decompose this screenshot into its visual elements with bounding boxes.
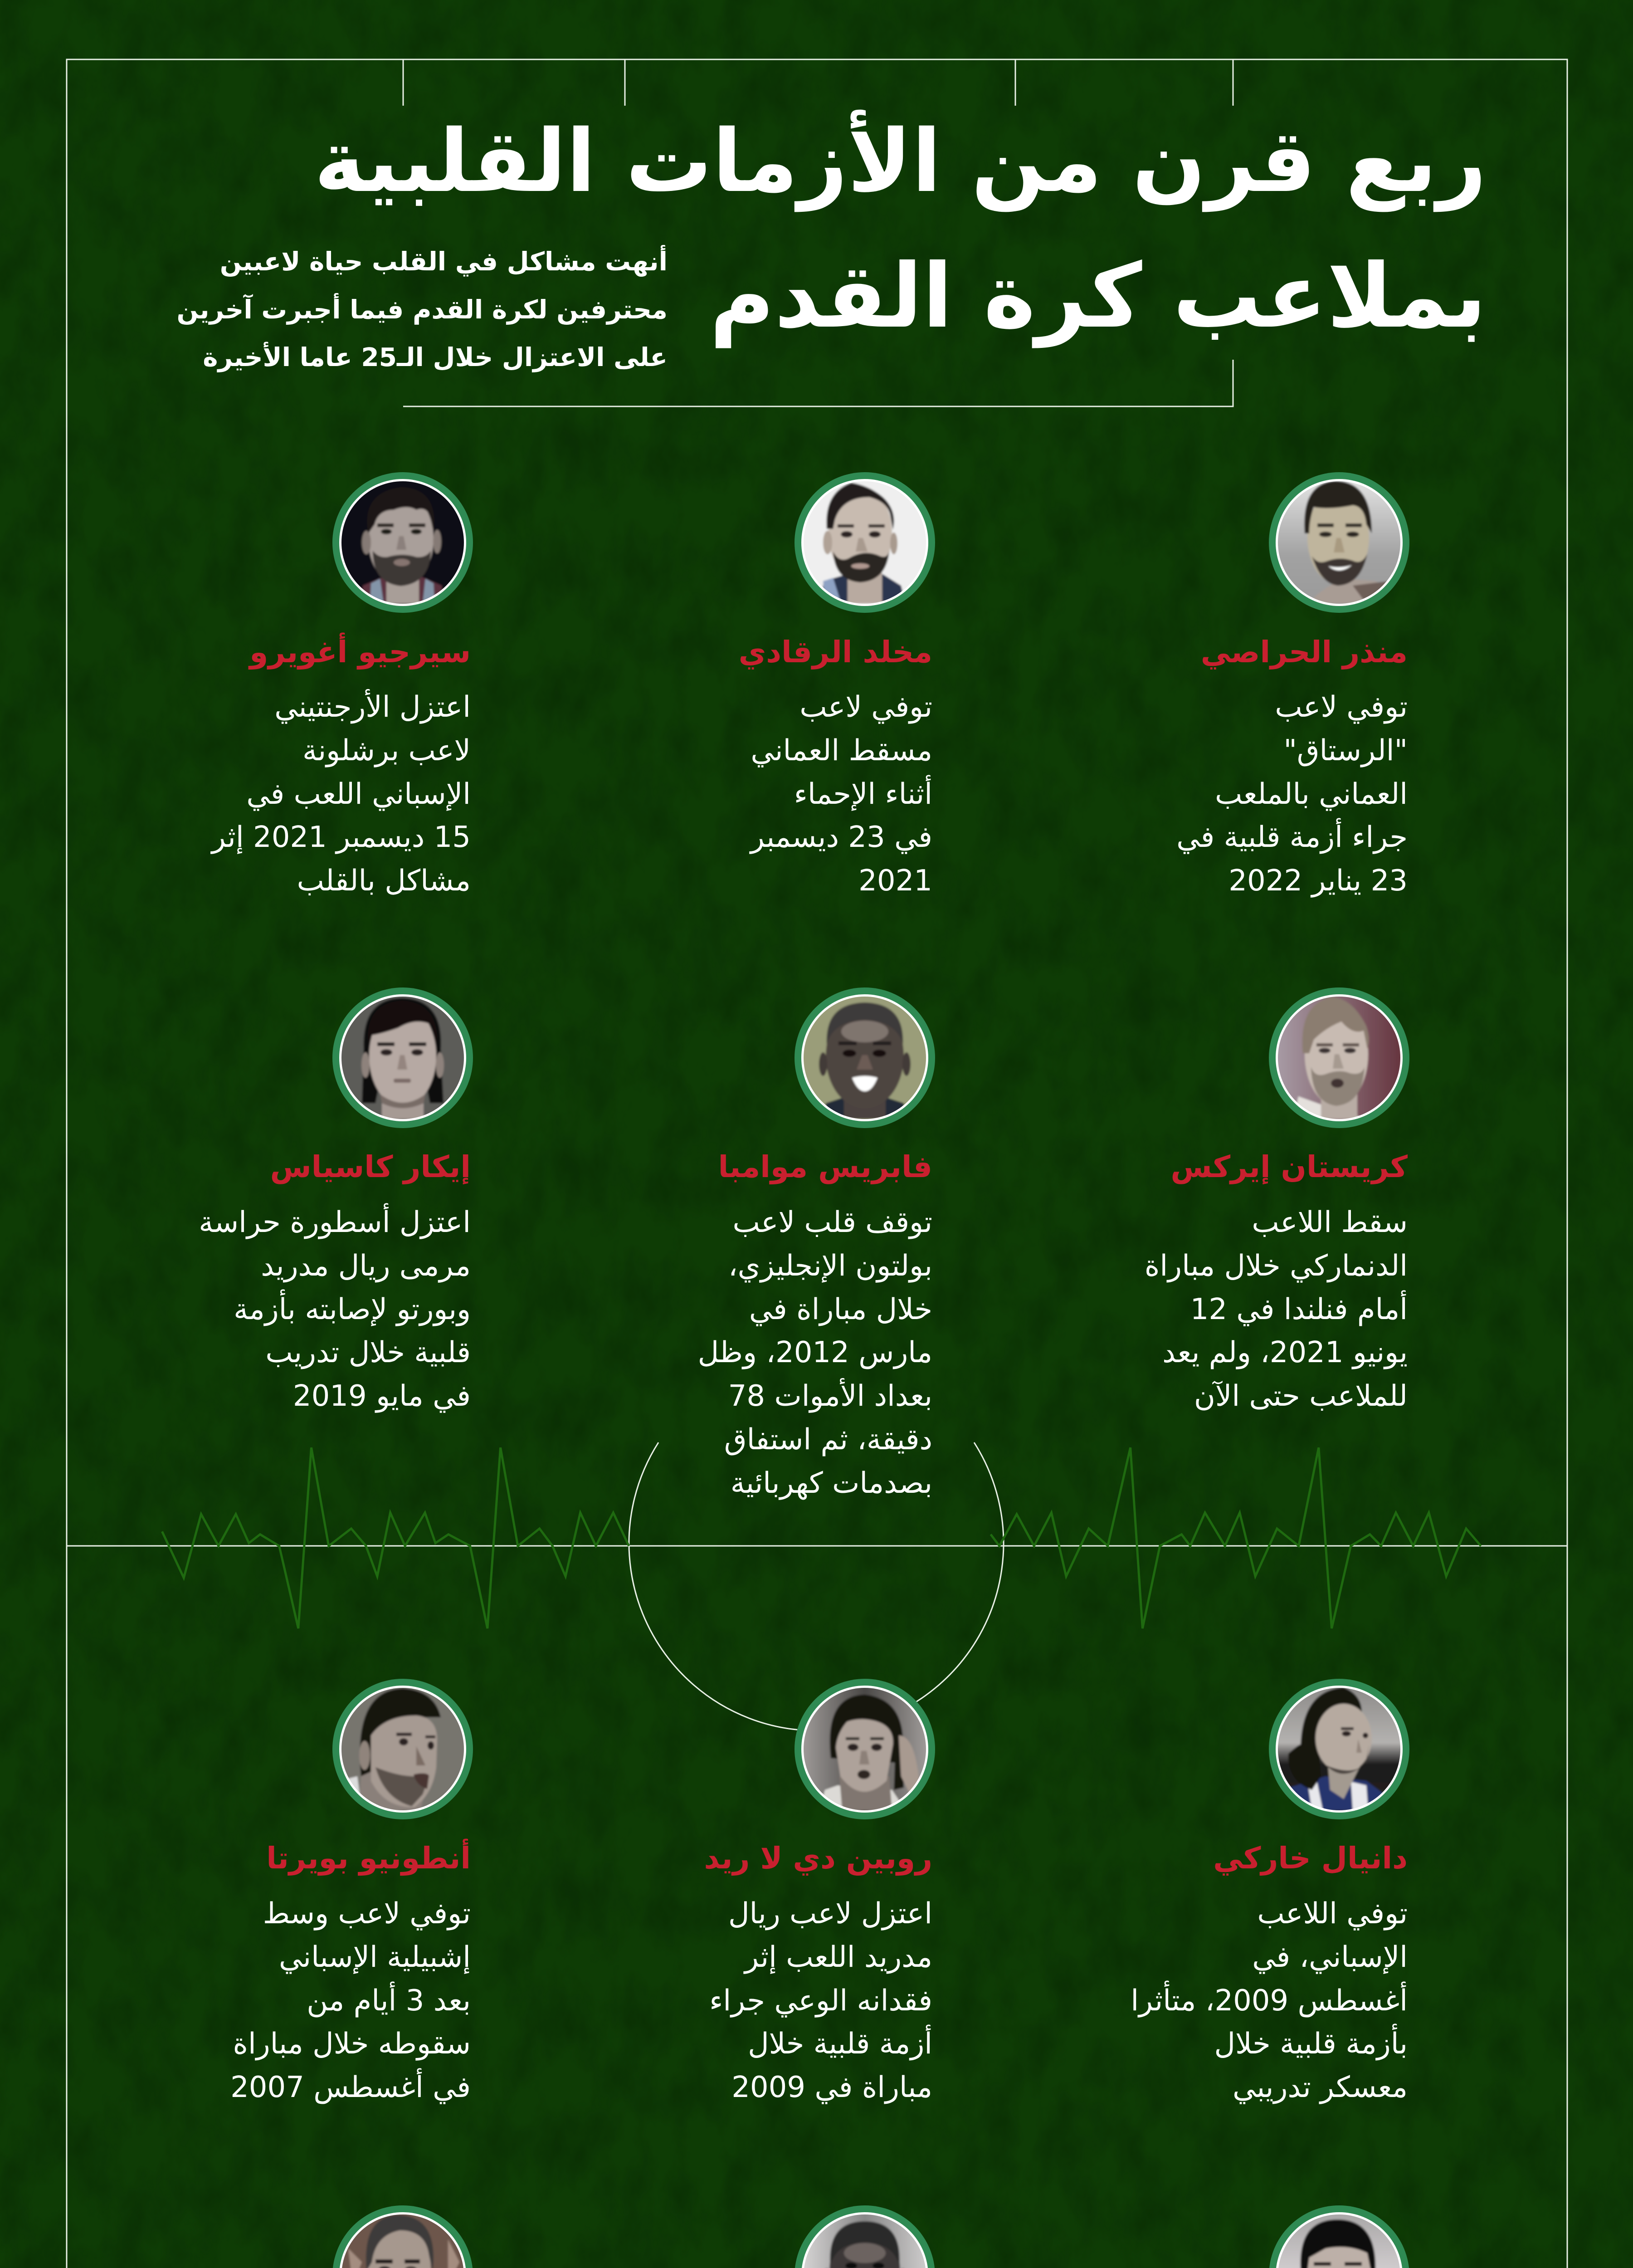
player text: Daniel Jarque: بأزمة قلبية خلال: [1214, 2024, 1408, 2061]
player text: Christian Eriksen: كريستان إيركس: [1170, 1149, 1408, 1185]
player text: Christian Eriksen: سقط اللاعب: [1252, 1206, 1408, 1239]
player text: Antonio Puerta: في أغسطس 2007: [230, 2068, 471, 2104]
player text: Ruben de la Red: اعتزل لاعب ريال: [728, 1897, 932, 1931]
player text: Iker Casillas: [199, 1149, 471, 1413]
player text: Fabrice Muamba: فابريس موامبا: [718, 1149, 932, 1185]
player text: Munthir Al-Harasi: توفي لاعب: [1275, 690, 1408, 724]
player text: Fabrice Muamba: توقف قلب لاعب: [732, 1206, 932, 1239]
portrait: Munthir Al-Harasi: [1269, 472, 1409, 613]
player text: Daniel Jarque: أغسطس 2009، متأثرا: [1131, 1980, 1408, 2018]
player text: Christian Eriksen: أمام فنلندا في 12: [1190, 1290, 1408, 1326]
player text: Daniel Jarque: معسكر تدريبي: [1233, 2071, 1408, 2104]
player text: Fabrice Muamba: خلال مباراة في: [749, 1293, 932, 1326]
player text: Fabrice Muamba: بعداد الأموات 78: [728, 1378, 932, 1413]
player text: Antonio Puerta: أنطونيو بويرتا: [266, 1838, 471, 1876]
player text: Daniel Jarque: توفي اللاعب: [1257, 1897, 1408, 1931]
heartbeat line chart decoration: [162, 1447, 1481, 1628]
player text: Fabrice Muamba: دقيقة، ثم استفاق: [724, 1423, 932, 1457]
portrait: Makhlad Al-Raqadi: [795, 472, 935, 613]
player text: Munthir Al-Harasi: العماني بالملعب: [1215, 777, 1408, 811]
player text: Fabrice Muamba: بولتون الإنجليزي،: [728, 1249, 932, 1283]
player text: Daniel Jarque: دانيال خاركي: [1213, 1841, 1408, 1876]
title: بملاعب كرة القدم: [710, 244, 1487, 348]
player text: Antonio Puerta: توفي لاعب وسط: [263, 1897, 471, 1931]
portrait: Mohamed Abdelwahab: [1269, 2205, 1409, 2268]
title: [314, 110, 1487, 348]
player text: Sergio Aguero: لاعب برشلونة: [302, 734, 471, 767]
player text: Antonio Puerta: سقوطه خلال مباراة: [233, 2027, 471, 2061]
portrait: Ruben de la Red: [795, 1679, 935, 1819]
player text: Makhlad Al-Raqadi: مخلد الرقادي: [739, 635, 932, 670]
player text: Makhlad Al-Raqadi: أثناء الإحماء: [794, 775, 932, 811]
player text: Munthir Al-Harasi: منذر الحراصي: [1201, 635, 1408, 670]
player text: Sergio Aguero: 15 ديسمبر 2021 إثر: [210, 821, 471, 854]
player text: Fabrice Muamba: مارس 2012، وظل: [698, 1336, 932, 1369]
player text: Sergio Aguero: سيرجيو أغويرو: [248, 632, 471, 670]
player text: Munthir Al-Harasi: 23 يناير 2022: [1228, 864, 1408, 898]
portrait: Hedi Ben Rekhissa: [332, 2205, 473, 2268]
portrait: Christian Eriksen: [1269, 987, 1409, 1128]
player text: Iker Casillas: قلبية خلال تدريب: [265, 1336, 471, 1369]
title: ربع قرن من الأزمات القلبية: [314, 110, 1487, 212]
player text: Sergio Aguero: مشاكل بالقلب: [297, 864, 471, 898]
player text: Munthir Al-Harasi: [1176, 635, 1408, 898]
player text: Sergio Aguero: [210, 632, 471, 898]
player text: Daniel Jarque: [1131, 1841, 1408, 2104]
player text: Iker Casillas: إيكار كاسياس: [270, 1149, 471, 1185]
player text: Fabrice Muamba: بصدمات كهربائية: [731, 1466, 932, 1500]
portrait: Fabrice Muamba: [795, 987, 935, 1128]
player text: Sergio Aguero: الإسباني اللعب في: [246, 777, 471, 811]
player text: Antonio Puerta: [230, 1838, 471, 2104]
portrait: Daniel Jarque: [1269, 1679, 1409, 1819]
portrait: Sergio Aguero: [332, 472, 473, 613]
portrait: Iker Casillas: [332, 987, 473, 1128]
player text: Daniel Jarque: الإسباني، في: [1252, 1941, 1408, 1974]
player text: Iker Casillas: وبورتو لإصابته بأزمة: [234, 1289, 471, 1326]
subtitle: [176, 245, 668, 372]
player text: Christian Eriksen: الدنماركي خلال مباراة: [1145, 1249, 1408, 1283]
subtitle: أنهت مشاكل في القلب حياة لاعبين: [220, 245, 668, 277]
player text: Fabrice Muamba: [698, 1149, 932, 1500]
player text: Ruben de la Red: مباراة في 2009: [731, 2071, 932, 2104]
portrait: Antonio Puerta: [332, 1679, 473, 1819]
player text: Ruben de la Red: أزمة قلبية خلال: [748, 2024, 932, 2061]
player text: Iker Casillas: اعتزل أسطورة حراسة: [199, 1203, 471, 1239]
player text: Makhlad Al-Raqadi: توفي لاعب: [799, 690, 932, 724]
player text: Ruben de la Red: [704, 1841, 932, 2104]
player text: Ruben de la Red: مدريد اللعب إثر: [743, 1941, 932, 1974]
player text: Ruben de la Red: فقدانه الوعي جراء: [709, 1984, 932, 2018]
player text: Munthir Al-Harasi: جراء أزمة قلبية في: [1176, 818, 1408, 854]
player text: Makhlad Al-Raqadi: 2021: [858, 864, 932, 898]
subtitle: على الاعتزال خلال الـ25 عاما الأخيرة: [203, 342, 668, 372]
player text: Munthir Al-Harasi: "الرستاق": [1283, 734, 1408, 767]
player text: Ruben de la Red: روبين دي لا ريد: [704, 1841, 932, 1876]
player text: Makhlad Al-Raqadi: [739, 635, 932, 898]
player text: Antonio Puerta: بعد 3 أيام من: [307, 1981, 471, 2018]
player text: Christian Eriksen: للملاعب حتى الآن: [1194, 1379, 1408, 1413]
player text: Christian Eriksen: يونيو 2021، ولم يعد: [1162, 1336, 1408, 1369]
player text: Antonio Puerta: إشبيلية الإسباني: [279, 1941, 471, 1974]
player text: Iker Casillas: في مايو 2019: [293, 1379, 471, 1413]
portrait: Marc-Vivien Foe: [795, 2205, 935, 2268]
player text: Iker Casillas: مرمى ريال مدريد: [261, 1249, 471, 1283]
player text: Makhlad Al-Raqadi: مسقط العماني: [751, 734, 932, 767]
player text: Christian Eriksen: [1145, 1149, 1408, 1413]
subtitle: محترفين لكرة القدم فيما أجبرت آخرين: [176, 293, 668, 325]
player text: Makhlad Al-Raqadi: في 23 ديسمبر: [749, 821, 932, 854]
player text: Sergio Aguero: اعتزل الأرجنتيني: [274, 689, 471, 724]
